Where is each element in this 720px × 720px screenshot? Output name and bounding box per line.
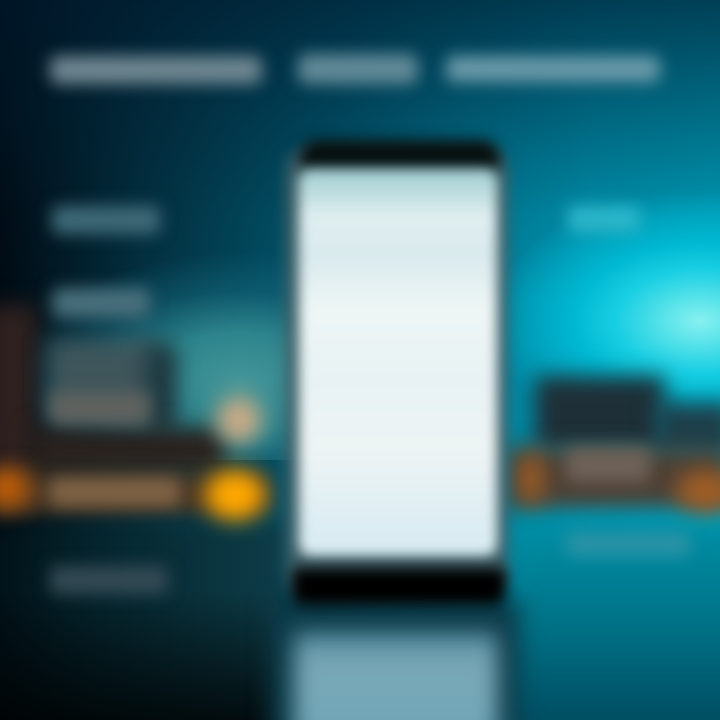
left label 1 (52, 206, 160, 234)
title word 2 (298, 54, 418, 84)
dark building at far left (0, 305, 38, 515)
right label 3 (566, 532, 690, 556)
lit street band (0, 472, 270, 516)
far right building (655, 402, 720, 456)
sky glow, right (490, 170, 720, 430)
mid buildings (48, 340, 158, 425)
phone top bezel (300, 140, 500, 168)
light: right orange glow 1 (518, 452, 544, 506)
tower (146, 345, 176, 430)
light: tan window glow (216, 396, 262, 444)
left label 3 (50, 392, 150, 424)
water: right (505, 522, 720, 720)
left label 4 (50, 478, 180, 506)
lit street band (505, 448, 720, 508)
water: centre base under phone (270, 600, 520, 720)
right label 2 (566, 448, 650, 482)
phone bottom bezel (292, 568, 506, 606)
left label 5 (50, 566, 168, 594)
dark building mass (535, 376, 665, 450)
water: left fade to black (0, 590, 290, 720)
skyline: right side (503, 358, 720, 521)
left label 2 (52, 288, 150, 318)
phone (279, 130, 518, 614)
water: left (0, 522, 290, 720)
light: far-left orange glow (0, 468, 30, 508)
right label 1 (568, 206, 640, 232)
phone reflection (294, 632, 498, 720)
title word 3 (446, 56, 660, 82)
phone screen (299, 170, 497, 556)
sky glow, left horizon (0, 200, 370, 460)
title word 1 (50, 56, 262, 84)
dark ground band (30, 428, 225, 472)
light: right orange glow 2 (676, 470, 720, 512)
title (illegible blurred heading) (40, 44, 670, 94)
phone body (286, 148, 508, 598)
light: amber glow (205, 470, 265, 520)
skyline: left side (0, 296, 280, 524)
